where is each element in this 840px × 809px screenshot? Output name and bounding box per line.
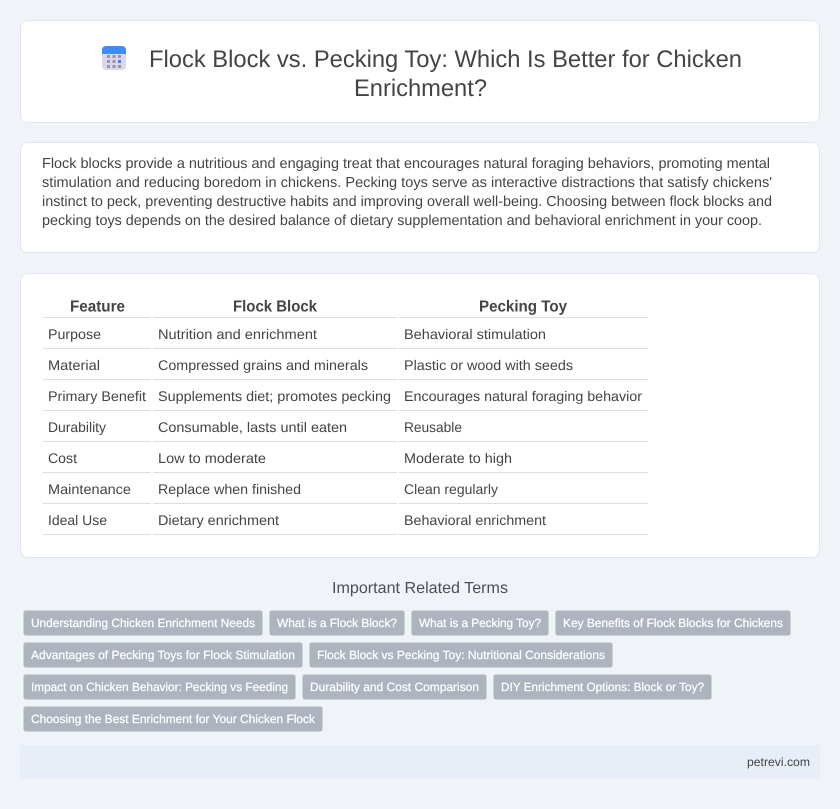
tag	[24, 610, 262, 636]
tag	[494, 674, 712, 700]
row: primary benefit: Supplements diet; promotes pecking	[158, 388, 391, 404]
tag	[556, 610, 790, 636]
row: purpose: Purpose	[48, 326, 101, 342]
row: cost: Cost	[48, 450, 77, 466]
row: cost	[48, 450, 512, 466]
row: maintenance	[48, 481, 498, 497]
row: maintenance: Clean regularly	[404, 481, 498, 497]
icon: calendar	[102, 46, 126, 70]
row: ideal use: Dietary enrichment	[158, 512, 279, 528]
footer	[20, 745, 820, 779]
row: primary benefit	[48, 388, 642, 404]
table header	[70, 298, 567, 316]
tag: Understanding Chicken Enrichment Needs	[31, 616, 255, 630]
tag: Flock Block vs Pecking Toy: Nutritional Considerations	[317, 648, 605, 662]
table header: Flock Block	[233, 298, 317, 316]
tag: What is a Pecking Toy?	[419, 616, 541, 630]
tag: What is a Flock Block?	[277, 616, 397, 630]
table header: Pecking Toy	[479, 298, 567, 316]
summary text: Flock blocks provide a nutritious and engaging treat that encourages natural foraging behaviors, promoting mental	[42, 156, 770, 172]
summary text	[42, 156, 772, 229]
row: cost: Low to moderate	[158, 450, 266, 466]
row: durability	[48, 419, 462, 435]
row: purpose	[48, 326, 546, 342]
tag	[302, 674, 486, 700]
tag: Advantages of Pecking Toys for Flock Stimulation	[31, 648, 295, 662]
tag	[412, 610, 548, 636]
panel: summary	[20, 142, 820, 252]
row: ideal use: Behavioral enrichment	[404, 512, 546, 528]
tag	[24, 642, 302, 668]
title: Flock Block vs. Pecking Toy: Which Is Better for Chicken	[149, 46, 742, 73]
table header: Feature	[70, 298, 125, 316]
row: material: Plastic or wood with seeds	[404, 357, 573, 373]
tag	[270, 610, 404, 636]
tag	[24, 706, 322, 732]
panel: comparison table	[20, 274, 820, 558]
tag: Impact on Chicken Behavior: Pecking vs Feeding	[31, 680, 288, 694]
tag: Choosing the Best Enrichment for Your Chicken Flock	[31, 712, 316, 726]
row: purpose: Nutrition and enrichment	[158, 326, 317, 342]
tag	[24, 674, 296, 700]
tag: Durability and Cost Comparison	[310, 680, 479, 694]
row: purpose: Behavioral stimulation	[404, 326, 546, 342]
heading: related terms: Important Related Terms	[332, 580, 508, 597]
row: material: Compressed grains and minerals	[158, 357, 368, 373]
row: primary benefit: Primary Benefit	[48, 388, 146, 404]
title	[149, 46, 742, 102]
row: cost: Moderate to high	[404, 450, 512, 466]
row: material: Material	[48, 357, 100, 373]
row: material	[48, 357, 573, 373]
row: primary benefit: Encourages natural foraging behavior	[404, 388, 642, 404]
row: durability: Reusable	[404, 419, 462, 435]
tag	[310, 642, 612, 668]
summary text: pecking toys depends on the desired balance of dietary supplementation and behavioral enrichment in your coop.	[42, 213, 762, 229]
row: maintenance: Maintenance	[48, 481, 131, 497]
tag: DIY Enrichment Options: Block or Toy?	[501, 680, 704, 694]
related term tags	[24, 610, 790, 732]
footer site name: petrevi.com	[747, 755, 810, 769]
row: ideal use	[48, 512, 546, 528]
row: maintenance: Replace when finished	[158, 481, 301, 497]
panel: header	[20, 20, 820, 122]
row: durability: Durability	[48, 419, 106, 435]
summary text: instinct to peck, preventing destructive habits and improving overall well-being. Choosing between flock blocks and	[42, 194, 772, 210]
row: durability: Consumable, lasts until eaten	[158, 419, 347, 435]
title: Enrichment?	[354, 75, 487, 102]
row: ideal use: Ideal Use	[48, 512, 107, 528]
summary text: stimulation and reducing boredom in chickens. Pecking toys serve as interactive distractions that satisfy chickens'	[42, 175, 772, 191]
tag: Key Benefits of Flock Blocks for Chickens	[563, 616, 783, 630]
